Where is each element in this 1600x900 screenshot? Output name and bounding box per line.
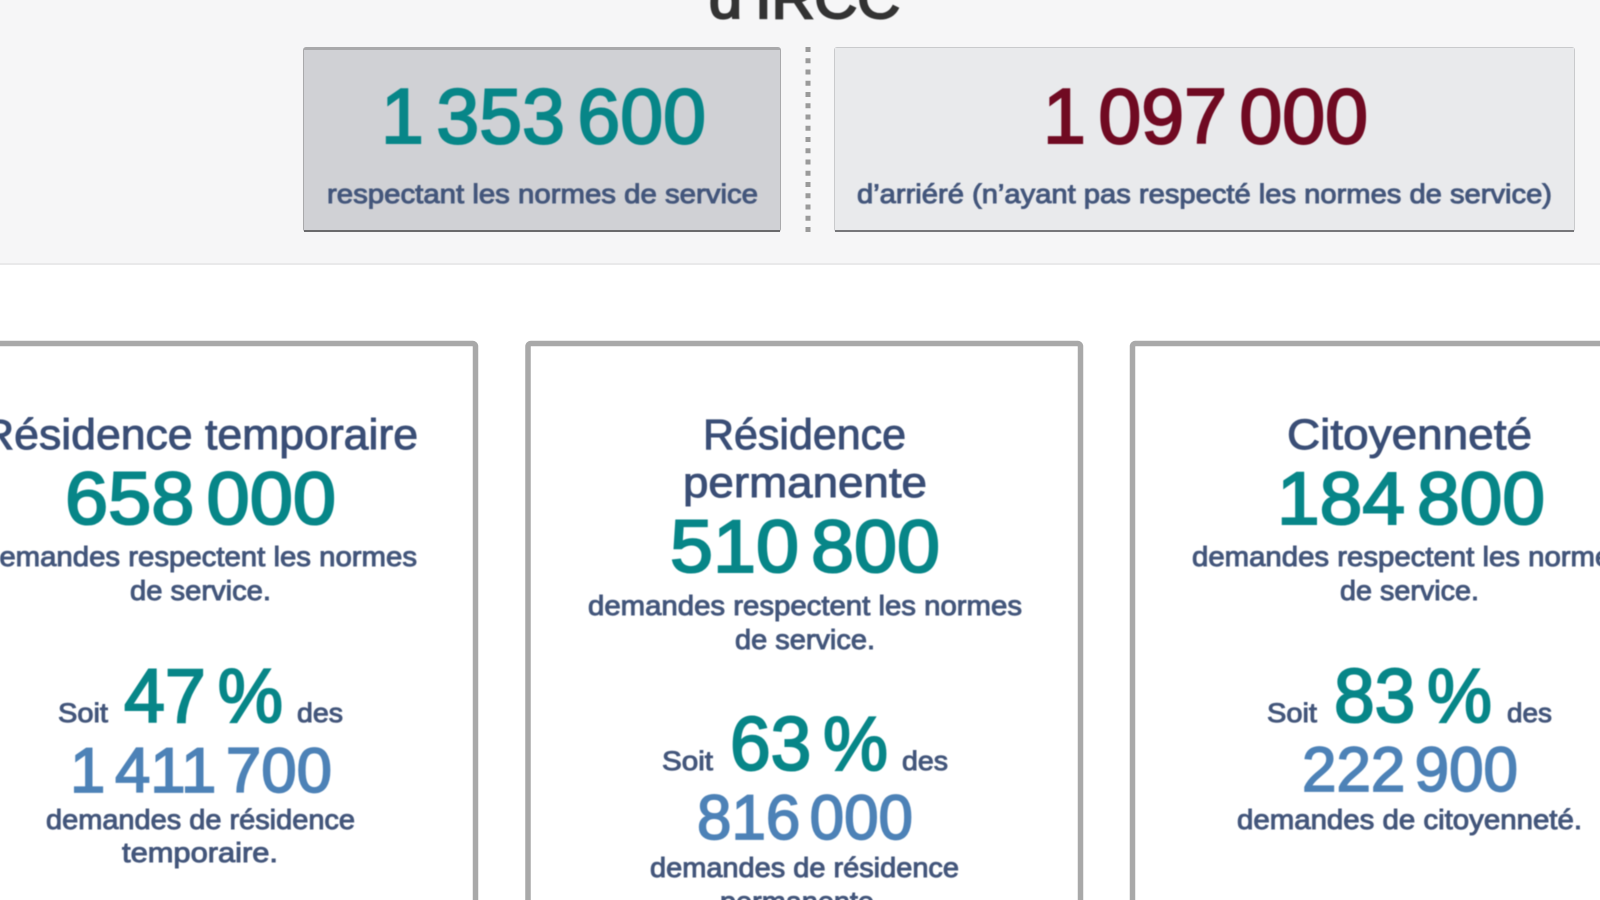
text: temporary residence applications: temporaire.	[122, 837, 278, 868]
stat: 658 000: 658 000	[65, 457, 336, 540]
text: temporary residence applications: demandes de résidence	[46, 804, 355, 835]
caption: within standards: respectant les normes de service	[327, 179, 758, 209]
heading	[683, 411, 927, 507]
stat: 1 097 000: 1 097 000	[1043, 72, 1368, 160]
panel: backlog	[834, 47, 1575, 232]
stat: 63 %	[662, 702, 948, 787]
text: meets standards	[0, 541, 417, 606]
stat: 1 353 600: 1 353 600	[381, 72, 706, 160]
heading: permanente	[683, 459, 927, 507]
stat: 83 %	[1267, 654, 1552, 739]
text: citizenship applications: demandes de citoyenneté.	[1237, 804, 1582, 835]
text: permanent residence applications: demandes de résidence	[650, 852, 959, 883]
panel: citizenship	[1132, 344, 1600, 900]
stat: 47 %: des	[297, 698, 343, 728]
text: permanent residence applications	[650, 852, 959, 900]
stat: 47 %: Soit	[58, 698, 109, 728]
text: meets standards: de service.	[1340, 575, 1479, 606]
stat: 816 000: 816 000	[697, 783, 913, 853]
stat: 83 %: des	[1507, 698, 1552, 728]
header band	[0, 0, 1600, 265]
text: temporary residence applications	[46, 804, 355, 868]
stat: 83 %: 83 %	[1334, 654, 1492, 739]
text: meets standards: de service.	[130, 575, 271, 606]
stat: 222 900: 222 900	[1302, 735, 1518, 805]
dotted divider	[806, 47, 810, 232]
stat: 1 411 700: 1 411 700	[70, 736, 332, 806]
text: meets standards	[588, 590, 1022, 655]
text: meets standards: demandes respectent les normes	[1192, 541, 1600, 572]
panel: within service standards	[303, 47, 781, 232]
stat: 63 %: Soit	[662, 746, 714, 776]
panel: permanent residence	[528, 344, 1080, 900]
panel: temporary residence	[0, 344, 476, 900]
stat: 63 %: des	[902, 746, 948, 776]
stat: 184 800: 184 800	[1277, 457, 1545, 540]
text: meets standards: de service.	[735, 624, 875, 655]
stat: 510 800: 510 800	[670, 505, 940, 588]
stat: 47 %	[58, 654, 343, 739]
stat: 47 %: 47 %	[124, 654, 283, 739]
heading: Résidence	[703, 411, 906, 459]
stat: 63 %: 63 %	[730, 702, 888, 787]
heading: Citoyenneté	[1287, 411, 1532, 459]
caption: backlog: d’arriéré (n’ayant pas respecté les normes de service)	[857, 179, 1552, 209]
stat: 83 %: Soit	[1267, 698, 1318, 728]
text: meets standards	[1192, 541, 1600, 606]
text: meets standards: demandes respectent les normes	[588, 590, 1022, 621]
